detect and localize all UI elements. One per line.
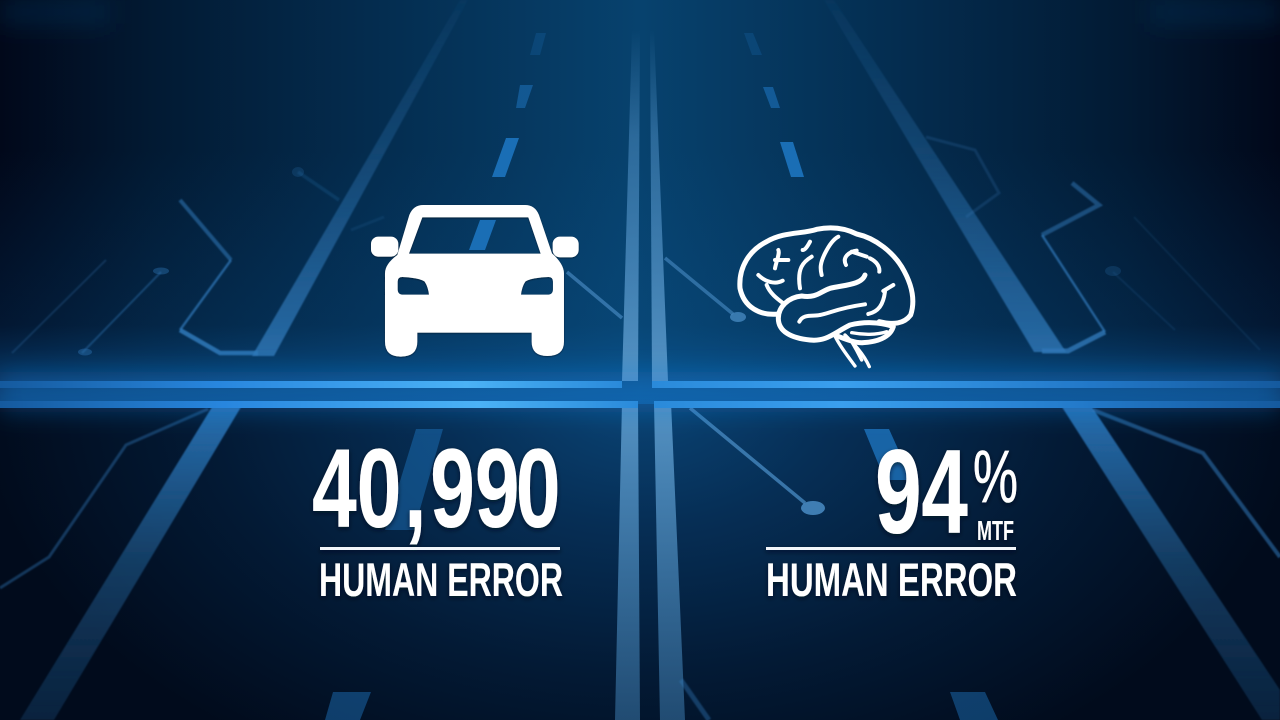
icon: car front view	[371, 205, 579, 357]
percent sign: %	[973, 435, 1018, 518]
lane dashes	[325, 33, 998, 720]
temporal lobe and cerebellum	[778, 275, 893, 343]
central vertical lane lines	[615, 30, 685, 720]
glowing horizontal light bands	[0, 372, 1280, 412]
trace end dots	[78, 167, 1121, 356]
icon: brain outline	[740, 228, 913, 367]
number 94: 94	[875, 424, 968, 558]
brain stem	[835, 332, 887, 367]
number 40,990: 40,990	[312, 426, 561, 551]
car right mirror	[553, 237, 579, 257]
brain outer contour	[740, 228, 913, 323]
right statistic: 94% human error	[766, 424, 1018, 606]
left statistic: 40,990 human error	[312, 426, 563, 606]
car body with windshield and headlight cutouts	[385, 205, 564, 357]
connector lines with end dots	[567, 258, 805, 503]
car left mirror	[371, 237, 398, 257]
label human error: HUMAN ERROR	[319, 553, 563, 606]
small garbled caption: MTF	[977, 515, 1014, 546]
right divider rule	[766, 547, 1016, 550]
left divider rule	[320, 547, 560, 550]
brain folds	[758, 237, 893, 322]
label human error: HUMAN ERROR	[766, 553, 1017, 606]
